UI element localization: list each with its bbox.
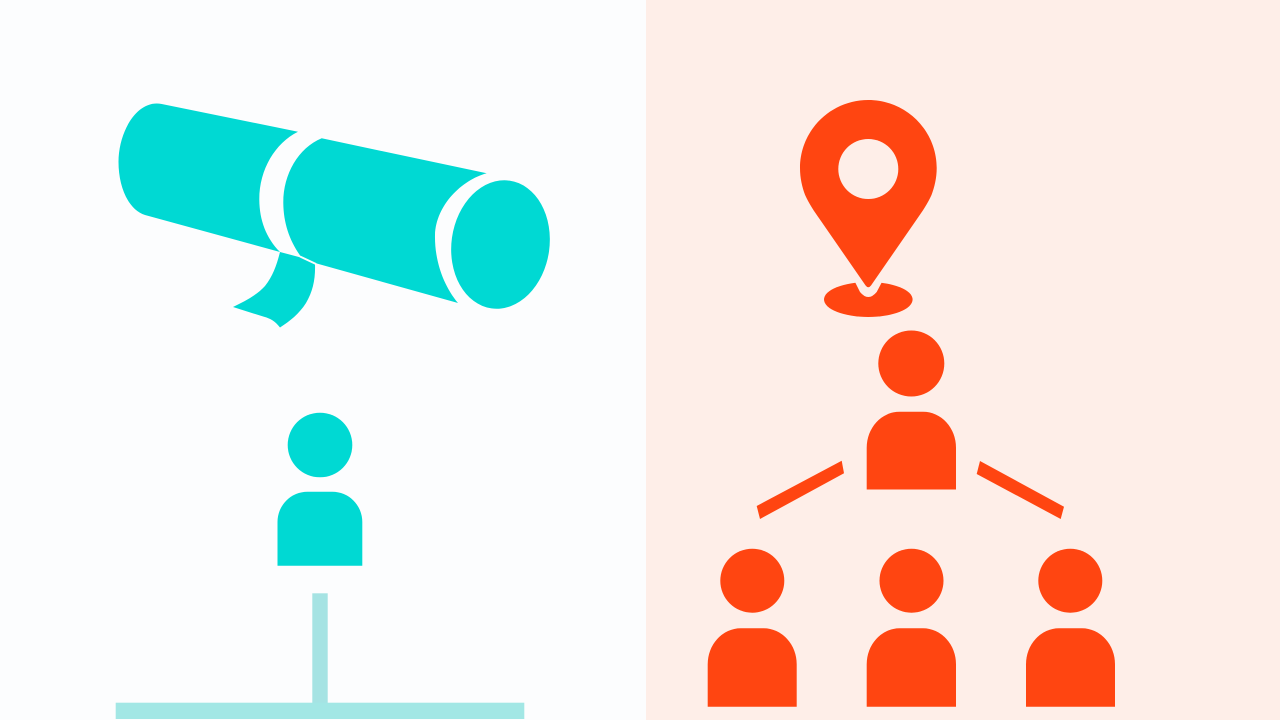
right connector (977, 461, 1064, 519)
ribbon gap sliver (300, 256, 316, 264)
scroll end cap (443, 174, 558, 315)
leader body (867, 412, 956, 490)
icon: single person (278, 413, 362, 566)
person body (278, 492, 362, 566)
leader head (878, 330, 944, 396)
icon: team hierarchy (708, 330, 1115, 707)
pin hole (838, 139, 898, 199)
pin base ellipse (824, 282, 913, 317)
scroll left segment (118, 103, 298, 252)
notch between pin tip and base (854, 280, 883, 297)
icon: location pin (800, 100, 937, 317)
icon: diploma scroll (118, 103, 558, 328)
person head (288, 413, 352, 477)
base bar (116, 703, 524, 719)
scroll right segment (283, 138, 487, 303)
member left (708, 549, 797, 707)
left connector (757, 461, 844, 519)
member centre (867, 549, 956, 707)
panel: right background (646, 0, 1280, 720)
stem (312, 593, 328, 705)
connector: vertical stem and base bar (116, 593, 524, 719)
panel: left background (0, 0, 646, 720)
pin body (800, 100, 937, 287)
member right (1026, 549, 1115, 707)
scroll ribbon (233, 252, 315, 328)
